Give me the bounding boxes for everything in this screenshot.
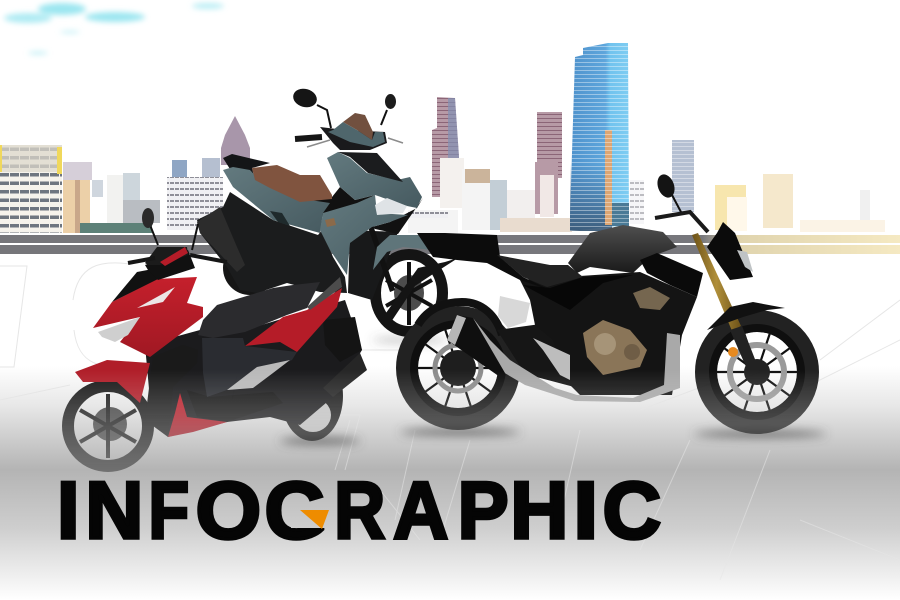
title: H — [510, 466, 568, 556]
title: C — [603, 466, 661, 556]
silver panel — [227, 360, 290, 390]
fork — [692, 233, 741, 331]
front body — [93, 277, 203, 357]
fuel tank — [568, 225, 677, 273]
headlight cowl — [707, 222, 753, 280]
black nose — [112, 268, 158, 302]
muffler — [447, 315, 505, 377]
under headlight — [372, 198, 423, 234]
red scooter — [68, 208, 367, 466]
muffler — [323, 353, 367, 397]
tail underside arm — [386, 260, 456, 320]
title: G — [265, 466, 328, 556]
dark base silhouette — [145, 300, 362, 437]
ground shadows — [280, 337, 826, 444]
front fender — [75, 360, 150, 403]
right buildings — [630, 140, 885, 232]
handlebars — [655, 212, 708, 232]
seat base — [262, 185, 375, 216]
title: P — [458, 465, 509, 556]
swing arm — [500, 324, 572, 386]
mirror — [657, 174, 682, 212]
faint background linework — [0, 263, 900, 580]
rear vent — [270, 211, 290, 226]
fender — [707, 302, 785, 330]
centre buildings — [408, 97, 572, 233]
side shield — [320, 195, 408, 275]
lower leg shield — [168, 393, 227, 437]
mirrors — [291, 86, 396, 128]
headlight — [375, 198, 407, 215]
reflector — [728, 347, 738, 357]
upper light slit — [137, 287, 175, 308]
neck — [145, 250, 195, 280]
rear wheel — [286, 389, 343, 441]
front wheel — [68, 386, 148, 466]
city skyline — [0, 43, 885, 233]
title: F — [148, 465, 189, 555]
rear body panel — [223, 167, 330, 233]
side panel — [245, 288, 342, 352]
front dark base — [348, 230, 398, 300]
pointed tower — [221, 116, 250, 165]
dark frame — [147, 388, 168, 437]
title — [57, 464, 661, 556]
frame mass — [520, 272, 697, 395]
rooftop wall — [0, 235, 900, 254]
front wheel — [376, 254, 442, 332]
front wheel — [706, 321, 808, 423]
radiator cowl — [640, 253, 703, 297]
teal scooter — [197, 86, 442, 332]
bronze engine — [583, 287, 670, 375]
title: I — [573, 466, 598, 556]
head base — [320, 127, 387, 150]
title: I — [57, 466, 80, 556]
seat — [198, 282, 320, 338]
front fender — [373, 235, 432, 270]
badge — [325, 218, 336, 227]
title: A — [393, 465, 448, 556]
seat — [252, 165, 332, 202]
cowl — [145, 247, 188, 265]
tall blue tower — [570, 43, 629, 231]
headlight — [737, 250, 753, 272]
chassis — [197, 192, 347, 293]
exhaust — [473, 318, 680, 402]
rear wheel — [407, 317, 509, 419]
headlight — [98, 317, 140, 342]
levers — [307, 138, 403, 147]
top shield — [327, 152, 422, 208]
tail — [417, 233, 542, 286]
tail top — [223, 154, 270, 180]
side cover — [523, 275, 633, 310]
footpeg — [533, 338, 570, 380]
seat — [497, 255, 583, 287]
handlebars — [295, 137, 322, 139]
title accent: orange wedge — [300, 510, 329, 529]
handlebars — [128, 255, 227, 263]
title: R — [334, 465, 385, 556]
hugger — [418, 302, 502, 335]
windscreen — [343, 113, 373, 140]
footpeg bracket — [498, 296, 530, 328]
black cowl — [338, 152, 403, 182]
mirrors — [142, 208, 198, 250]
fork — [368, 225, 395, 292]
black naked motorcycle — [381, 172, 808, 423]
under seat body — [202, 338, 297, 397]
sky clouds — [4, 3, 224, 54]
title: N — [85, 466, 143, 556]
floor — [227, 422, 228, 423]
grab rail — [307, 277, 342, 310]
rear wheel — [223, 241, 277, 295]
title: O — [196, 464, 261, 556]
head shell — [328, 122, 385, 147]
muffler box — [197, 207, 245, 272]
left buildings — [0, 116, 250, 233]
rear bracket — [323, 317, 362, 362]
